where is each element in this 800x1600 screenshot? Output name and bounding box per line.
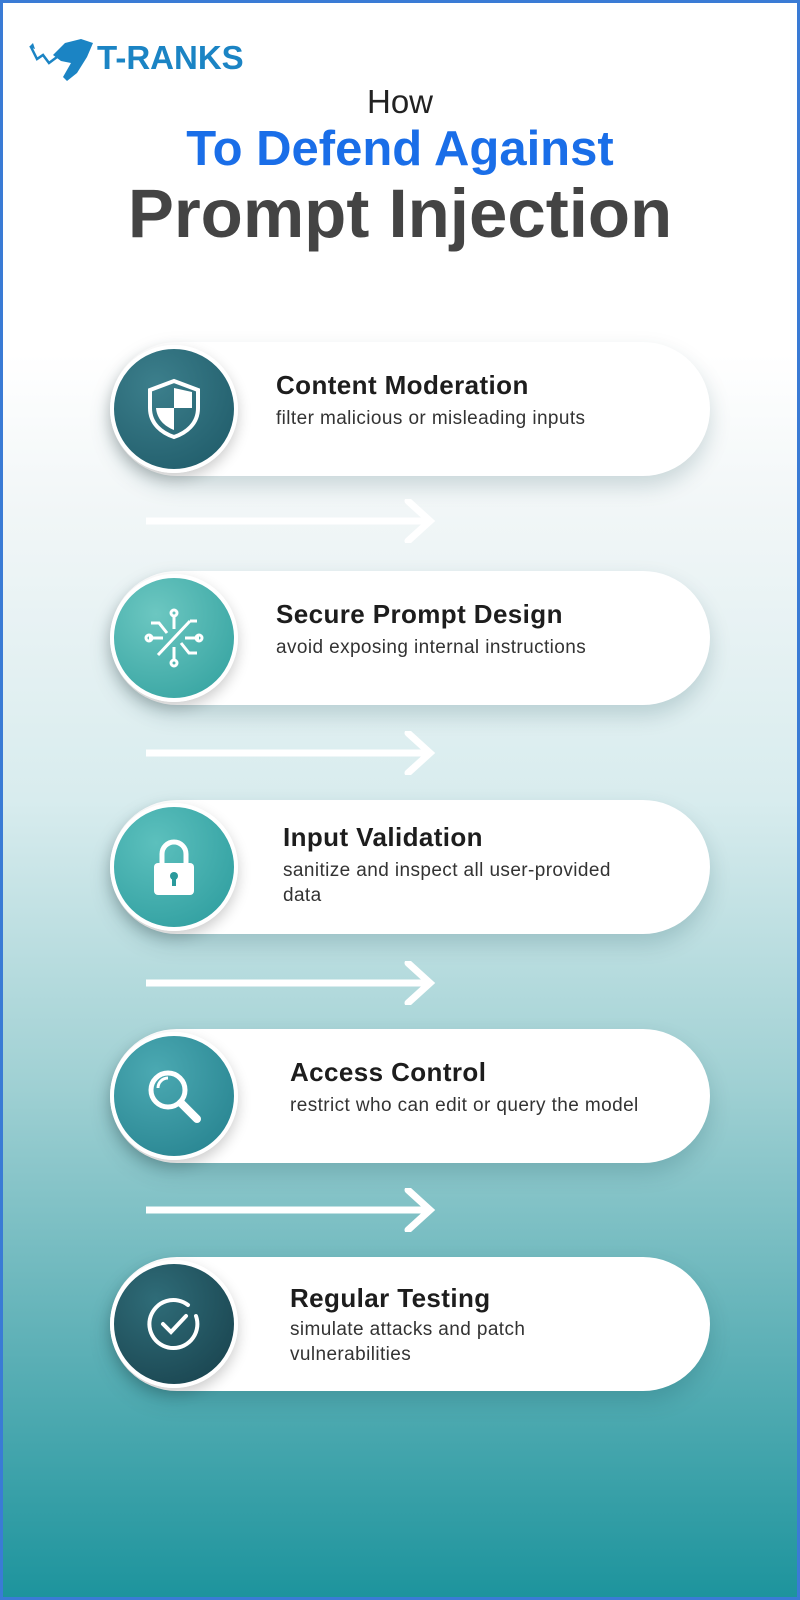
card: input validation: Input Validation — [283, 822, 483, 852]
icon: circuit — [110, 574, 238, 702]
icon: magnifier — [110, 1032, 238, 1160]
icon: lock — [110, 803, 238, 931]
logo — [29, 39, 244, 81]
card: access control — [110, 1029, 710, 1163]
card: content moderation: filter malicious or misleading inputs — [276, 408, 585, 429]
card: input validation: sanitize and inspect all user-provided data — [283, 860, 611, 906]
logo: T-RANKS — [97, 39, 244, 76]
arrow 2 — [146, 731, 435, 775]
card: secure prompt design — [110, 571, 710, 705]
card: secure prompt design: avoid exposing internal instructions — [276, 637, 586, 658]
icon: check — [110, 1260, 238, 1388]
arrow 4 — [146, 1188, 436, 1232]
card: access control: Access Control — [290, 1057, 486, 1087]
title: How — [367, 83, 433, 120]
icon: shield — [110, 345, 238, 473]
title: Prompt Injection — [128, 175, 672, 252]
card: regular testing: Regular Testing — [290, 1283, 491, 1313]
arrow 1 — [146, 499, 435, 543]
arrow 3 — [146, 961, 435, 1005]
card: content moderation — [110, 342, 710, 476]
card: regular testing: simulate attacks and patch vulnerabilities — [290, 1319, 525, 1365]
title: To Defend Against — [186, 122, 614, 176]
card: input validation — [110, 800, 710, 934]
card: regular testing — [110, 1257, 710, 1391]
card: content moderation: Content Moderation — [276, 370, 529, 400]
card: secure prompt design: Secure Prompt Design — [276, 599, 563, 629]
card: access control: restrict who can edit or query the model — [290, 1095, 639, 1116]
title — [128, 83, 672, 252]
